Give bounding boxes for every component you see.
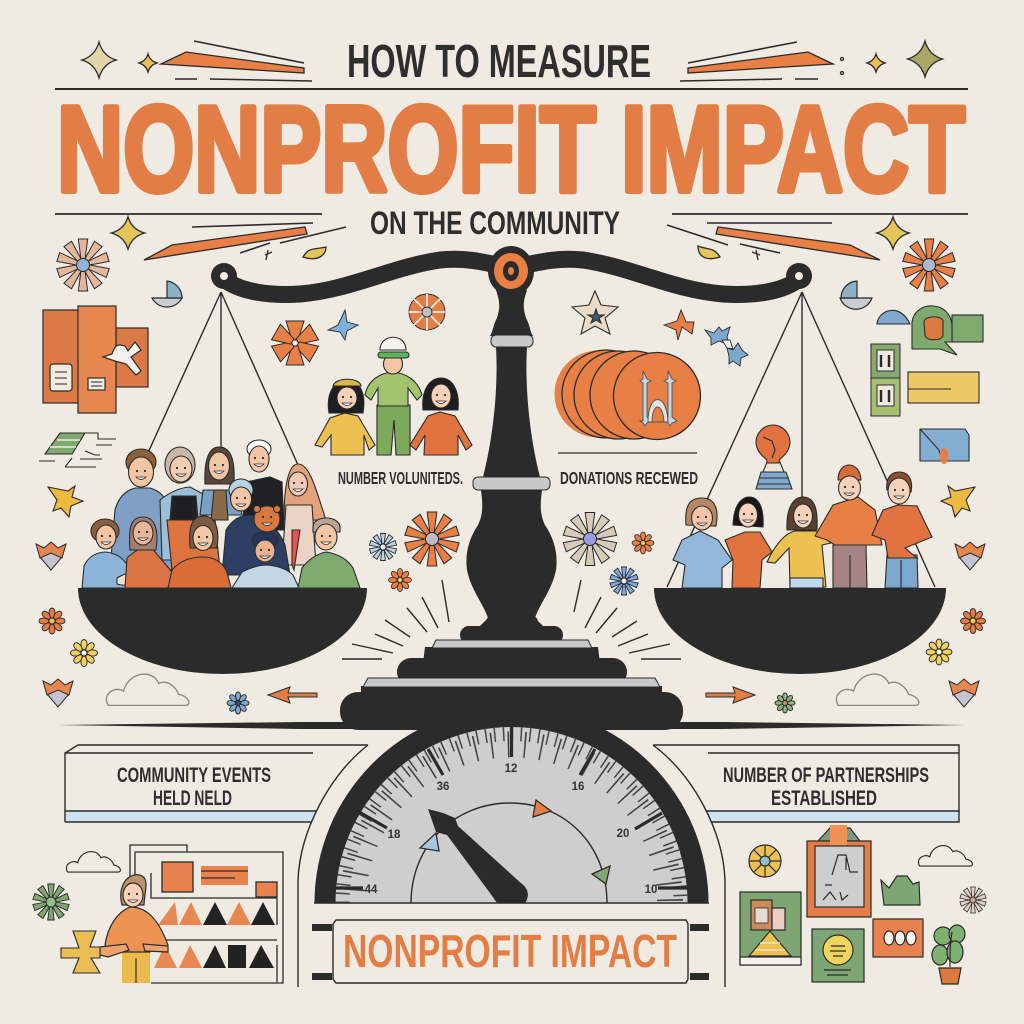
label box: partnerships (653, 745, 959, 822)
icon: flower small orange right (632, 532, 654, 554)
illustration: presenter (100, 875, 168, 983)
icon: pie left (152, 281, 182, 307)
icon: yellow wheel (749, 845, 781, 877)
icon: flower right orange (960, 608, 986, 634)
divider above title (55, 88, 968, 90)
icon: potted plant (932, 925, 965, 984)
icon: tulip left upper (36, 542, 66, 570)
icon: flower large orange center (405, 512, 459, 566)
icon: blue card (920, 429, 969, 464)
person: child pale blue (232, 532, 299, 588)
person: woman orange sweater (125, 517, 173, 588)
gauge markers (420, 800, 610, 884)
person: man orange brown hair (872, 472, 932, 588)
banner text: NONPROFIT IMPACT (343, 925, 677, 977)
illustration: green landscape (881, 876, 920, 905)
person: man orange cap (815, 465, 882, 588)
gauge major ticks (336, 727, 687, 888)
person: woman front left (82, 519, 150, 588)
balance beam (211, 246, 812, 296)
gauge inner arc (411, 803, 607, 903)
rays right of base (574, 580, 681, 659)
icon: cloud right lower (918, 846, 972, 866)
rays left of base (342, 580, 449, 659)
label text: established: ESTABLISHED (771, 787, 877, 810)
label box: community events (65, 745, 368, 822)
icon: pie right (840, 281, 872, 309)
icon: yellow star right (941, 486, 975, 517)
icon: arrow right (706, 687, 755, 703)
person: orange woman black hair (725, 497, 772, 588)
gauge scale numbers: 36 (437, 781, 449, 793)
gauge (314, 706, 709, 903)
icon: cloud over board (66, 852, 120, 872)
gauge scale numbers: 44 (365, 884, 378, 896)
volunteers group (315, 337, 472, 455)
gauge scale numbers: 18 (388, 829, 401, 841)
icon: large spoke flower left (57, 239, 109, 291)
icon: cloud right (836, 674, 919, 705)
gauge needle (428, 809, 528, 903)
people group: right pan (673, 465, 932, 588)
label text: number of partnerships: NUMBER OF PARTNERSHIPS (723, 764, 929, 787)
gauge scale numbers (365, 763, 657, 896)
label text: held neld: HELD NELD (153, 787, 232, 810)
bottom banner (312, 920, 709, 983)
decoration: lower left sparkles and wedge (55, 214, 968, 260)
person: man white hair (240, 440, 284, 530)
icon: speech bubble and dome (877, 306, 983, 355)
icon: tulip right upper (955, 542, 985, 570)
icon: flower left yellow (70, 640, 98, 666)
illustration: green square with badge (812, 929, 864, 982)
icon: yellow x star (61, 931, 100, 973)
icon: tan star (572, 291, 618, 334)
icon: flower left orange (39, 608, 65, 634)
person: blue coat with hat (673, 498, 732, 588)
volunteer: yellow shirt (315, 379, 375, 455)
decoration: lower right sparkles and wedge (667, 217, 909, 260)
balance column (466, 280, 557, 628)
icon: blue star (328, 310, 358, 340)
illustration: community event board (130, 845, 283, 983)
icon: light bulb trophy (756, 425, 792, 489)
icon: flower right yellow (926, 639, 952, 665)
icon: green list (39, 433, 116, 467)
label text: community events: COMMUNITY EVENTS (117, 764, 271, 787)
person: man orange front (168, 516, 231, 588)
person: yellow woman brown hair (767, 497, 835, 588)
icon: tulip left lower (43, 679, 73, 707)
icon: flower tan (563, 512, 617, 566)
icon: yellow card (908, 372, 979, 403)
gauge scale numbers: 10 (645, 884, 657, 896)
coins stack (554, 350, 700, 440)
decoration: top right sparkles and wedge (680, 41, 942, 81)
icon: flower blue right (610, 567, 638, 595)
person: woman long red hair (282, 464, 326, 570)
icon: cloud left (106, 674, 189, 705)
icon: green wheel (33, 884, 69, 920)
subtitle: on the community: ON THE COMMUNITY (370, 205, 620, 241)
left scale strings (147, 292, 298, 470)
coin emblem (640, 371, 677, 426)
person: man green sweater (298, 518, 360, 588)
label: number volunteers: NUMBER VOLUNITEDS. (338, 468, 463, 488)
gauge medium ticks (353, 745, 670, 903)
illustration: clipboard (807, 825, 871, 917)
volunteer: orange shirt (410, 378, 472, 455)
person: woman dark hair denim jacket (200, 447, 242, 520)
icon: flower blue left (227, 692, 249, 714)
people group: left pan (82, 440, 360, 588)
person: woman light blue hat (222, 479, 290, 575)
gauge scale numbers: 20 (617, 828, 629, 840)
icon: orange asterisk (271, 321, 319, 365)
person: man brown hair (110, 449, 172, 570)
illustration: green poster with pyramid (740, 892, 801, 965)
gauge scale numbers: 12 (505, 763, 517, 775)
icon: arrow left (268, 687, 317, 703)
label: donations received: DONATIONS RECEWED (560, 468, 698, 488)
person: woman tan hood (160, 447, 220, 570)
icon: blue stars cluster (705, 327, 748, 366)
icon: green squares (871, 344, 900, 416)
heading: how to measure: HOW TO MEASURE (347, 35, 651, 87)
left pan (78, 588, 367, 674)
icon: tulip right lower (949, 679, 979, 707)
right pan (654, 588, 946, 674)
right scale strings (667, 292, 935, 587)
gauge scale numbers: 16 (572, 781, 584, 793)
icon: orange bow (664, 310, 694, 340)
toy: orange teddy (254, 506, 280, 532)
divider under coins (558, 452, 697, 454)
icon: folders with bird (43, 306, 148, 413)
icon: flower small orange center (388, 568, 412, 592)
gauge minor ticks (342, 734, 680, 903)
icon: large spoke flower right (903, 239, 955, 291)
volunteer: green helmet (365, 337, 422, 455)
balance base (58, 616, 965, 730)
icon: flower tan lower right (960, 887, 986, 913)
icon: yellow star left (48, 486, 83, 517)
icon: flower green right (775, 693, 795, 713)
icon: orange wheel (409, 294, 445, 330)
icon: flower blue center (369, 534, 397, 560)
illustration: orange card with eggs (873, 919, 923, 957)
decoration: top left sparkles and wedge (82, 41, 312, 81)
arch outlines around gauge (298, 745, 725, 987)
